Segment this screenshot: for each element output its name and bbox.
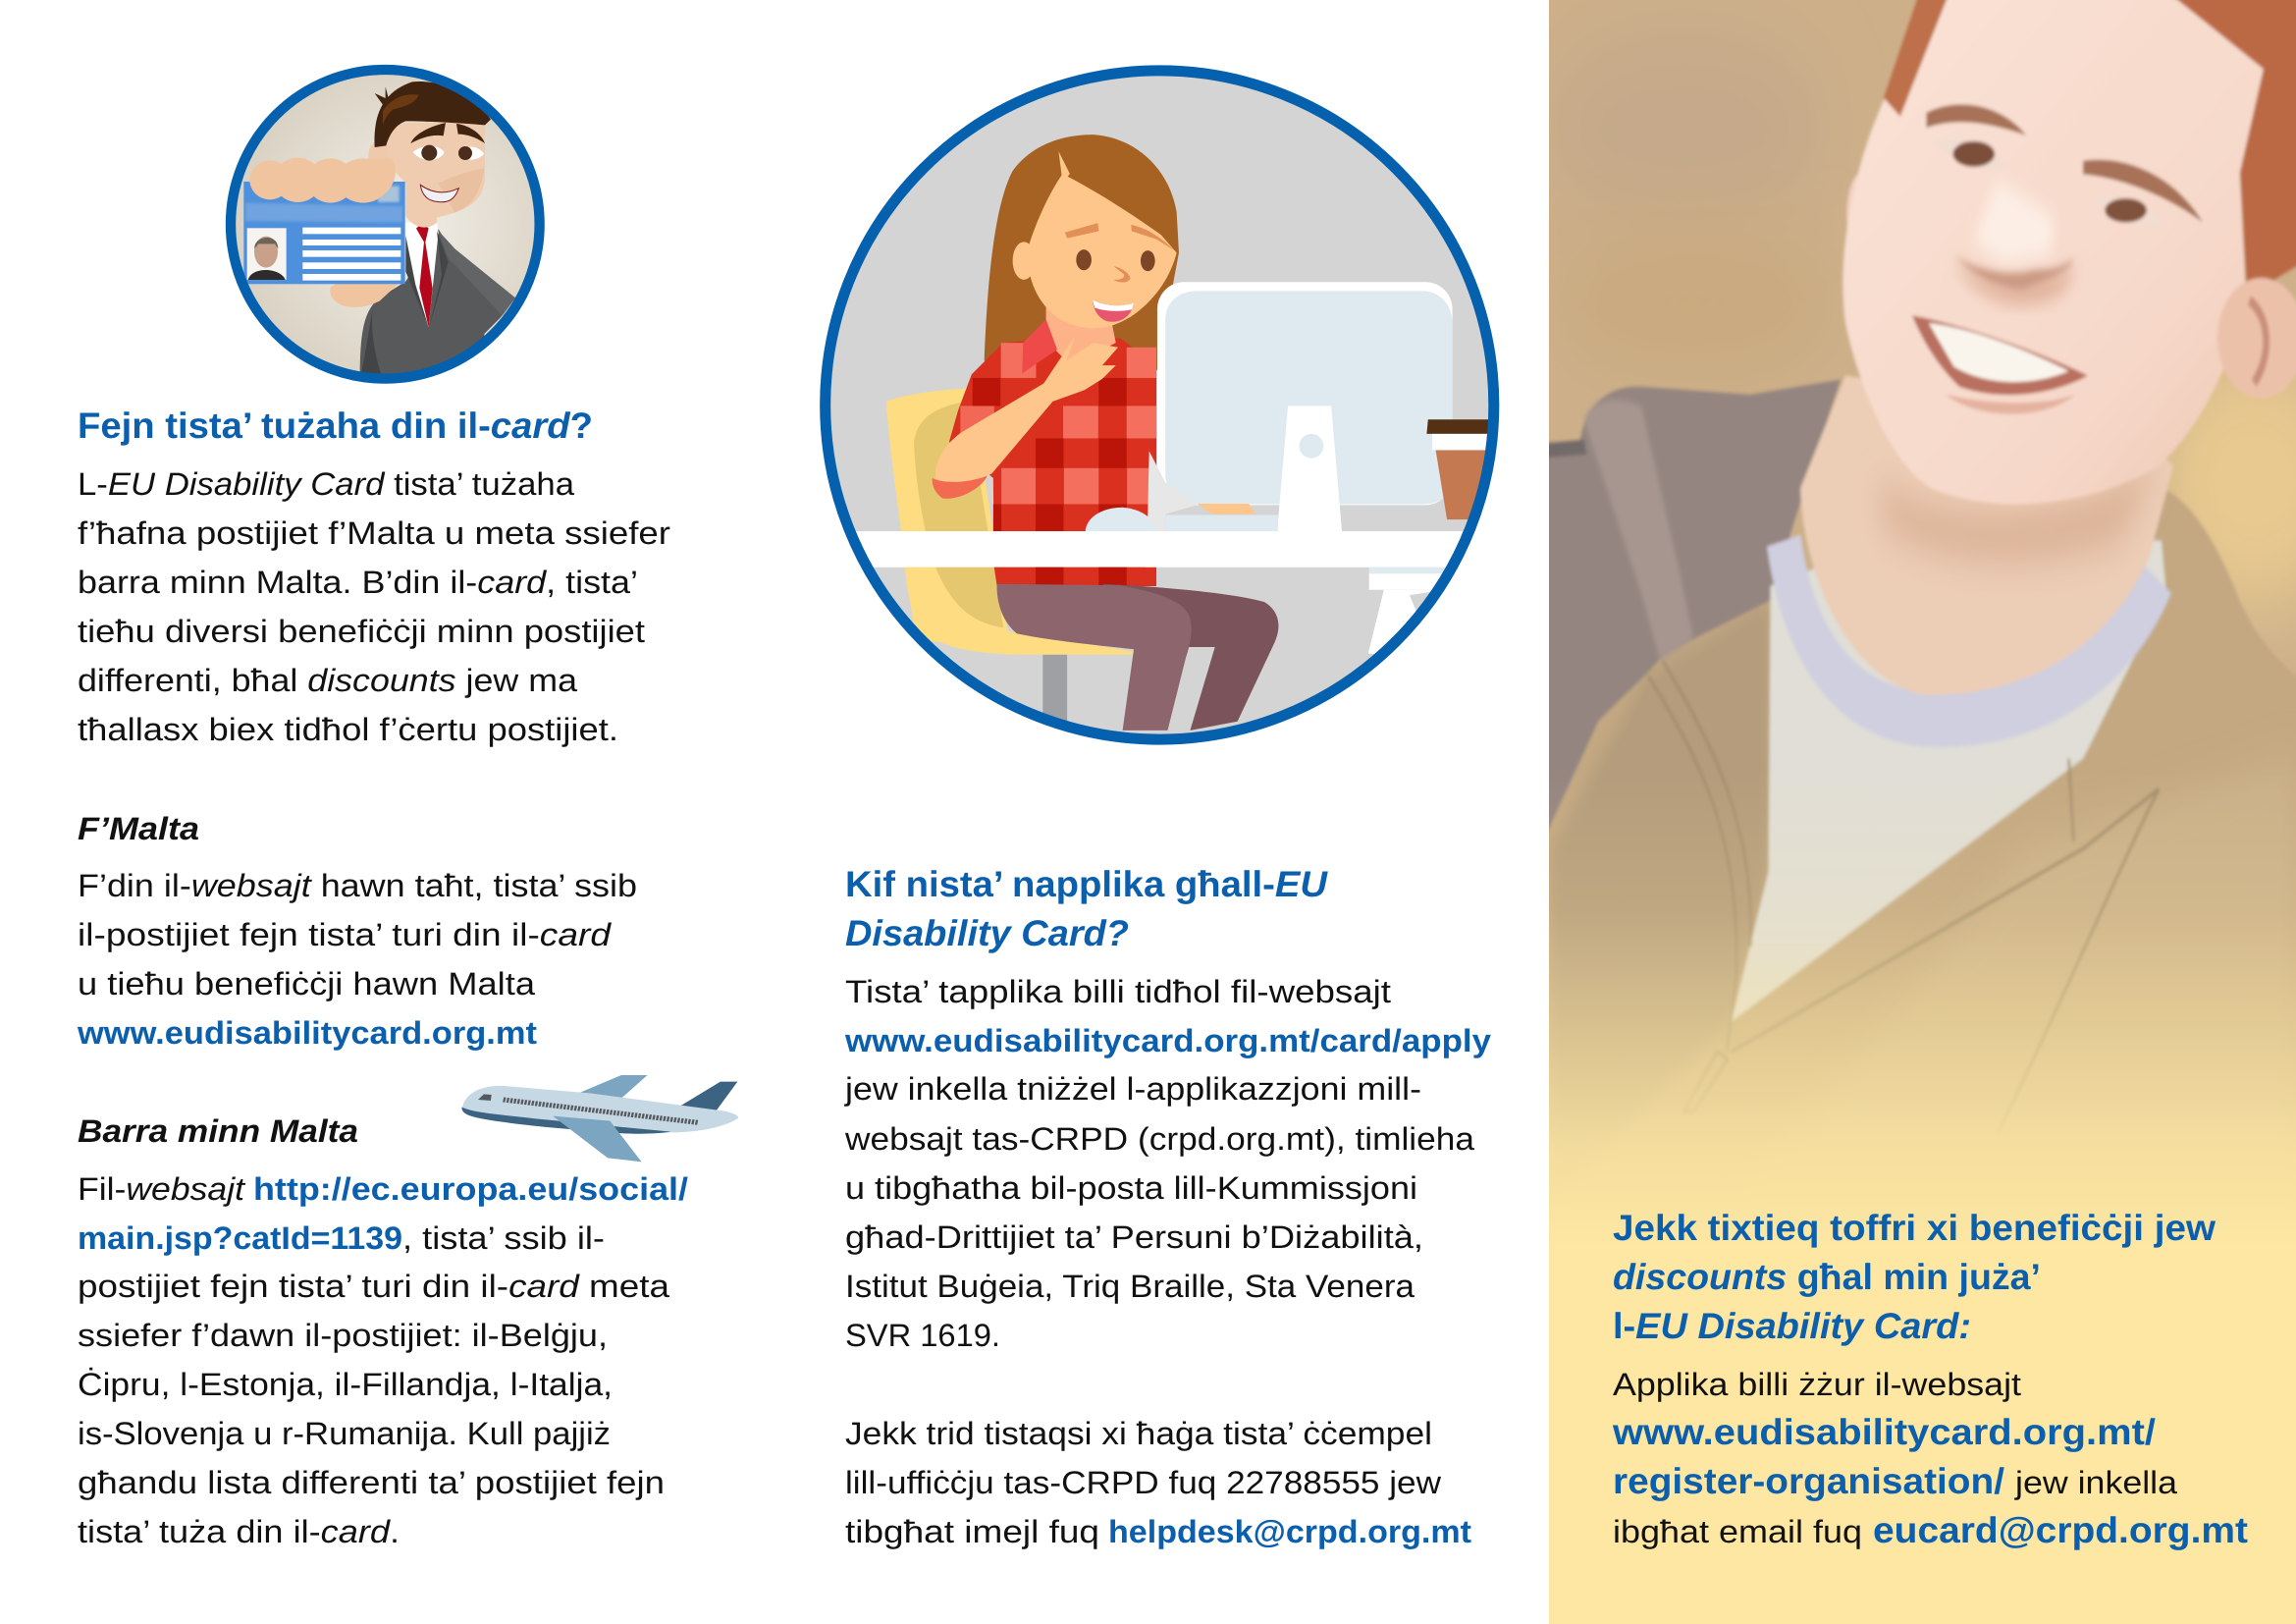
text block: organisations offering benefits: eucard@crpd.org.mt [1873, 1510, 2248, 1550]
text block: questions contact [845, 1416, 1471, 1549]
yellow fade over photo [1549, 766, 2296, 1247]
yellow background panel [1549, 0, 2296, 1624]
neck [1800, 375, 2173, 695]
text block: organisations offering benefits: jew inkella [2014, 1465, 2178, 1500]
text block: organisations offering benefits: ibgħat email fuq [1613, 1514, 1862, 1549]
panel: right photo column [1522, 0, 2296, 1624]
photo: smiling young man [1549, 0, 2296, 1176]
text block: where to use the card: tħallasx biex tidħol f’ċertu postijiet. [78, 712, 618, 747]
heading: offer benefits: Jekk tixtieq toffri xi benefiċċji jew [1613, 1208, 2216, 1248]
heading: how to apply [845, 864, 1328, 953]
text block: questions contact: helpdesk@crpd.org.mt [1108, 1514, 1471, 1549]
text block: how to apply: u tibgħatha bil-posta lill-Kummissjoni [845, 1170, 1417, 1206]
text block: where to use the card: L-EU Disability Card tista’ tużaha [78, 466, 575, 502]
text block: how to apply: għad-Drittijiet ta’ Persuni b’Diżabilità, [845, 1219, 1423, 1255]
text block: where to use the card: tieħu diversi benefiċċji minn postijiet [78, 614, 645, 649]
text block: outside Malta: http://ec.europa.eu/social/ [253, 1171, 688, 1207]
text block: outside Malta: is-Slovenja u r-Rumanija. Kull pajjiż [78, 1416, 611, 1451]
text block: how to apply: websajt tas-CRPD (crpd.org.mt), timlieha [844, 1121, 1475, 1157]
text block: where to use the card [78, 406, 670, 747]
text block: in Malta: F’din il- websajt hawn taħt, tista’ ssib [78, 868, 637, 903]
text block: in Malta: www.eudisabilitycard.org.mt [77, 1015, 537, 1051]
icon: man holding disability card [226, 66, 547, 386]
text block: outside Malta: main.jsp?catId=1139 [78, 1220, 402, 1256]
text block: outside Malta: Ċipru, l-Estonja, il-Fillandja, l-Italja, [78, 1367, 613, 1402]
text block: outside Malta: Fil-websajt [78, 1171, 246, 1207]
text block: how to apply: Tista’ tapplika billi tidħol fil-websajt [845, 974, 1391, 1009]
text block: where to use the card: differenti, bħal discounts jew ma [78, 663, 578, 698]
text block: where to use the card: f’ħafna postijiet f’Malta u meta ssiefer [78, 515, 670, 551]
text block: organisations offering benefits [1612, 1208, 2248, 1550]
text block: questions contact: lill-uffiċċju tas-CRPD fuq 22788555 jew [845, 1465, 1442, 1500]
text block: how to apply [844, 864, 1491, 1353]
text block: organisations offering benefits: www.eudisabilitycard.org.mt/ [1612, 1412, 2156, 1452]
heading: offer benefits: l-EU Disability Card: [1613, 1306, 1971, 1346]
tee [1732, 526, 2166, 1021]
text block: outside Malta: , tista’ ssib il- [402, 1220, 605, 1256]
icon: woman at computer [823, 68, 1499, 744]
icon: airplane [461, 1075, 738, 1162]
text block: outside Malta: postijiet fejn tista’ turi din il- card meta [78, 1269, 670, 1304]
text block: in Malta: u tieħu benefiċċji hawn Malta [78, 966, 536, 1001]
text block: outside Malta: ssiefer f’dawn il-postijiet: il-Belġju, [78, 1318, 608, 1353]
text block: organisations offering benefits: register-organisation/ [1613, 1461, 2004, 1501]
text block: in Malta: il-postijiet fejn tista’ turi din il- card [78, 917, 612, 952]
text block: organisations offering benefits: Applika billi żżur il-websajt [1613, 1367, 2021, 1402]
heading: how to apply: Disability Card? [845, 913, 1129, 953]
text block: outside Malta [78, 1113, 688, 1549]
text block: where to use the card: barra minn Malta. B’din il- card, tista’ [78, 565, 638, 600]
heading: offer benefits: discounts għal min juża’ [1613, 1257, 2041, 1297]
heading: offer benefits [1613, 1208, 2216, 1346]
heading: where to use: Fejn tista’ tużaha din il- card? [78, 406, 593, 446]
text block: how to apply: jew inkella tniżżel l-applikazzjoni mill- [844, 1071, 1421, 1107]
text block: in Malta [77, 811, 637, 1051]
heading: how to apply: Kif nista’ napplika għall- EU [845, 864, 1328, 904]
text block: outside Malta: għandu lista differenti ta’ postijiet fejn [78, 1465, 665, 1500]
text block: how to apply: www.eudisabilitycard.org.mt/card/apply [844, 1023, 1491, 1058]
text block: outside Malta: tista’ tuża din il- card. [78, 1514, 400, 1549]
text block: how to apply: SVR 1619. [845, 1318, 1000, 1353]
text block: questions contact: tibgħat imejl fuq [845, 1514, 1099, 1549]
subheading: F'Malta: F’Malta [78, 811, 199, 846]
subheading: Barra minn Malta: Barra minn Malta [78, 1113, 358, 1149]
text block: questions contact: Jekk trid tistaqsi xi ħaġa tista’ ċċempel [845, 1416, 1432, 1451]
text block: how to apply: Istitut Buġeia, Triq Braille, Sta Venera [845, 1269, 1415, 1304]
